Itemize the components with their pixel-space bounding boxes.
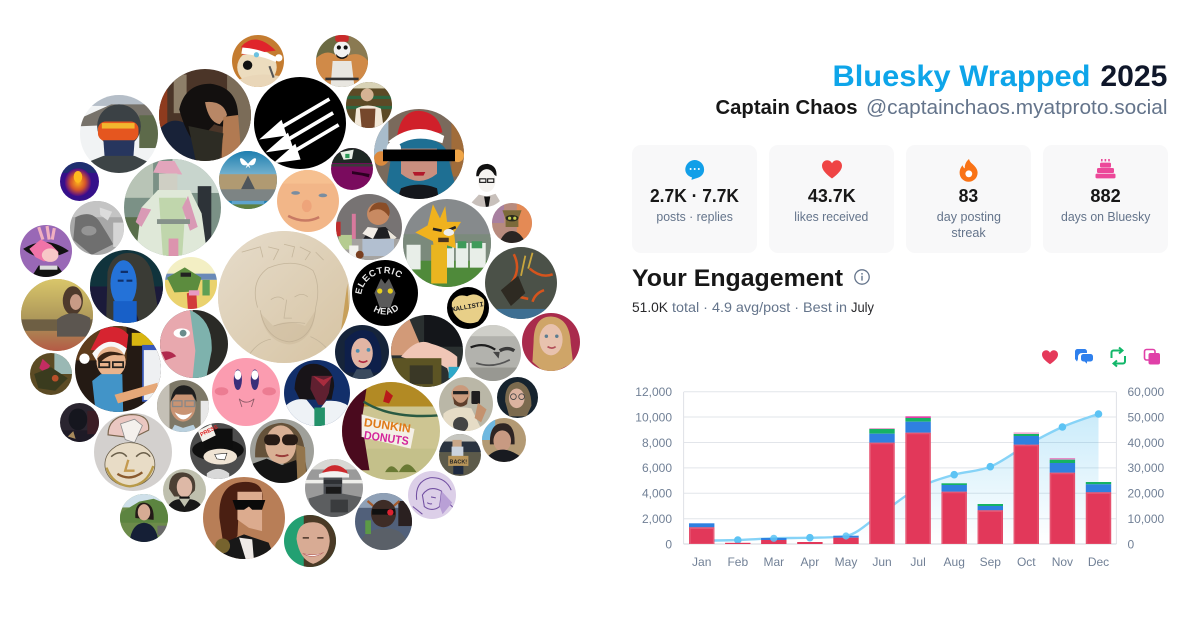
avatar: reindeer antlers man bbox=[355, 493, 412, 550]
bar: Apr bbox=[797, 542, 823, 544]
avatar: Electric Head logo bbox=[352, 260, 418, 326]
stat card: posts and replies: posts · replies bbox=[656, 210, 733, 224]
avatar: woman with choker bbox=[163, 469, 206, 512]
profile name and handle bbox=[716, 97, 1168, 119]
legend icons bbox=[1042, 348, 1160, 366]
icon: info bbox=[855, 270, 869, 284]
avatar: robot in pink light bbox=[492, 203, 532, 243]
avatar: ski goggles bbox=[80, 95, 158, 173]
icon: repost arrows bbox=[1112, 348, 1125, 366]
avatar: green hooded smile bbox=[284, 515, 336, 567]
month labels: Jan bbox=[692, 555, 711, 569]
stat card: day posting streak: day posting bbox=[937, 210, 1001, 224]
avatar: toddler in santa hat bbox=[75, 326, 161, 412]
month labels: Jul bbox=[910, 555, 926, 569]
month labels: Sep bbox=[980, 555, 1001, 569]
right axis labels: 20,000 bbox=[1128, 487, 1165, 501]
bar: Sep bbox=[978, 504, 1003, 544]
engagement summary: total · 4.9 avg/post · Best in bbox=[672, 299, 847, 315]
avatar: arrows logo bbox=[254, 77, 346, 169]
title: 2025 bbox=[1100, 60, 1167, 93]
grid lines bbox=[684, 392, 1116, 544]
month labels: Aug bbox=[944, 555, 965, 569]
icon: quote squares bbox=[1144, 350, 1160, 364]
month labels: Feb bbox=[727, 555, 748, 569]
left axis labels: 6,000 bbox=[642, 461, 672, 475]
bar: Mar bbox=[761, 538, 786, 544]
avatar: robocop santa bbox=[305, 459, 363, 517]
month labels: Apr bbox=[801, 555, 819, 569]
right axis labels bbox=[1128, 385, 1165, 551]
bar: Jul bbox=[905, 416, 931, 544]
stat card: day posting streak bbox=[906, 145, 1031, 253]
left axis labels: 12,000 bbox=[635, 385, 672, 399]
stat card: days on Bluesky: days on Bluesky bbox=[1061, 210, 1151, 224]
icon: heart bbox=[822, 160, 842, 178]
avatar: bald smiling man bbox=[277, 170, 339, 232]
left axis labels: 2,000 bbox=[642, 512, 672, 526]
icon: likes heart bbox=[1042, 350, 1058, 364]
avatar: pink witch character bbox=[20, 225, 72, 277]
avatar: dark portrait bbox=[60, 403, 99, 442]
right axis labels: 50,000 bbox=[1128, 410, 1165, 424]
engagement summary: July bbox=[851, 299, 874, 315]
profile name and handle: Captain Chaos bbox=[716, 97, 858, 119]
right axis labels: 60,000 bbox=[1128, 385, 1165, 399]
avatar: Dunkin Donuts scene bbox=[342, 382, 440, 480]
left axis labels bbox=[635, 385, 672, 551]
avatar: etched man with glasses bbox=[463, 163, 507, 207]
avatar: blurry woman in yellow room bbox=[21, 279, 93, 351]
avatar: smiling man with glasses bbox=[157, 380, 209, 432]
month labels: Nov bbox=[1052, 555, 1073, 569]
line points over bars bbox=[770, 532, 850, 542]
month labels bbox=[692, 555, 1109, 569]
left axis labels: 0 bbox=[665, 537, 672, 551]
stat card: days on Bluesky bbox=[1043, 145, 1168, 253]
heading: Your Engagement: Your Engagement bbox=[632, 265, 843, 292]
stat card: posts and replies: 2.7K · 7.7K bbox=[650, 186, 739, 206]
stat card: posts and replies bbox=[632, 145, 757, 253]
engagement summary: 51.0K bbox=[632, 299, 669, 315]
month labels: May bbox=[835, 555, 857, 569]
month labels: Oct bbox=[1017, 555, 1036, 569]
bar: May bbox=[833, 536, 859, 544]
avatar: clown mask strongman bbox=[316, 35, 368, 87]
avatar: pencil sketch self portrait bbox=[218, 231, 350, 363]
avatar: Electric Head logo: ELECTRIC bbox=[355, 266, 402, 294]
title: Bluesky Wrapped bbox=[832, 60, 1090, 93]
avatar: purple cartoon bbox=[331, 148, 373, 190]
avatar: Dunkin Donuts scene: DONUTS bbox=[363, 429, 410, 448]
avatar: blonde woman on red bbox=[522, 313, 580, 371]
avatar: santa hat blue hair censored bbox=[374, 109, 464, 199]
avatar: Japanese dragon print bbox=[485, 247, 557, 319]
avatar: Kallisti apple bbox=[447, 287, 489, 329]
line points behind bars bbox=[734, 410, 1102, 544]
avatar: woman outdoors on mountain bbox=[120, 494, 168, 542]
avatar: grey fuzzy photo bbox=[70, 201, 124, 255]
avatar: Kirby bbox=[212, 358, 280, 426]
left axis labels: 10,000 bbox=[635, 410, 672, 424]
avatar: yellow mascot Kalliope bbox=[403, 199, 491, 287]
right axis labels: 30,000 bbox=[1128, 461, 1165, 475]
avatar: curly haired woman bbox=[159, 69, 251, 161]
stat card: likes received: likes received bbox=[794, 210, 868, 224]
cumulative line bbox=[702, 414, 1098, 541]
icon: replies bubbles bbox=[1075, 349, 1093, 364]
avatar cloud bbox=[20, 35, 580, 567]
avatar: flower painting bbox=[30, 353, 72, 395]
avatar: dark haired woman bbox=[335, 325, 389, 379]
month labels: Jun bbox=[872, 555, 892, 569]
avatar: red helmet lab coat bbox=[284, 360, 350, 426]
avatar: Dunkin Donuts scene: DUNKIN bbox=[363, 416, 412, 436]
avatar: Louvre pyramid bbox=[219, 151, 277, 209]
stat card: likes received: 43.7K bbox=[808, 186, 856, 206]
month labels: Mar bbox=[763, 555, 784, 569]
avatar: bearded man mirror selfie bbox=[439, 377, 493, 431]
avatar: kid with candle bbox=[336, 194, 402, 260]
stat card: days on Bluesky: 882 bbox=[1090, 186, 1121, 206]
avatar: pink Darth Vader costume bbox=[124, 159, 221, 256]
avatar: sign holder at protest: BACK! bbox=[450, 459, 467, 465]
chart: monthly engagement bbox=[635, 385, 1165, 569]
bar: Aug bbox=[942, 483, 967, 544]
bar: Oct bbox=[1014, 432, 1039, 544]
left axis labels: 4,000 bbox=[642, 487, 672, 501]
profile name and handle: @captainchaos.myatproto.social bbox=[866, 97, 1168, 119]
icon: birthday cake bbox=[1096, 159, 1116, 178]
avatar: Kallisti apple: KALLISTI bbox=[451, 301, 484, 315]
avatar: grumpy grey cat bbox=[465, 325, 521, 381]
stat card: day posting streak: 83 bbox=[959, 186, 978, 206]
bar: Feb bbox=[725, 543, 750, 544]
right axis labels: 10,000 bbox=[1128, 512, 1165, 526]
avatar: red hair sunglasses portrait bbox=[203, 477, 285, 559]
avatar: bear in santa hat bbox=[232, 35, 284, 87]
right axis labels: 40,000 bbox=[1128, 436, 1165, 450]
avatar: blue lit face bbox=[90, 250, 163, 323]
bar: Dec bbox=[1086, 482, 1111, 544]
avatar: thermal image bbox=[60, 162, 99, 201]
left axis labels: 8,000 bbox=[642, 436, 672, 450]
avatar: bartender bbox=[346, 82, 392, 128]
avatar: purple line art bbox=[408, 471, 456, 519]
avatar: Electric Head logo: HEAD bbox=[374, 305, 398, 315]
avatar: woman with large sunglasses bbox=[250, 419, 314, 483]
stat card: day posting streak: streak bbox=[951, 226, 986, 240]
icon: chat bubble bbox=[685, 160, 704, 180]
bar: Jan bbox=[689, 523, 714, 544]
area under cumulative line bbox=[702, 414, 1098, 544]
icon: flame bbox=[960, 159, 978, 182]
month labels: Dec bbox=[1088, 555, 1109, 569]
bar: Nov bbox=[1050, 458, 1075, 544]
avatar: woman with round glasses bbox=[497, 377, 538, 418]
right axis labels: 0 bbox=[1128, 537, 1134, 551]
stacked bars bbox=[689, 416, 1111, 544]
avatar: press hat cartoon bbox=[190, 423, 246, 479]
avatar: frog on the beach bbox=[165, 257, 217, 309]
avatar: press hat cartoon: PRESS bbox=[199, 424, 219, 438]
avatar: teal haired woman bbox=[160, 310, 228, 378]
avatar: mushroom cat drawing bbox=[94, 413, 172, 491]
avatar: sign holder at protest bbox=[439, 434, 481, 476]
avatar: dark curly hair woman bbox=[482, 418, 526, 462]
bar: Jun bbox=[869, 428, 895, 544]
avatar: piglet bbox=[391, 315, 463, 387]
stat card: likes received bbox=[769, 145, 894, 253]
